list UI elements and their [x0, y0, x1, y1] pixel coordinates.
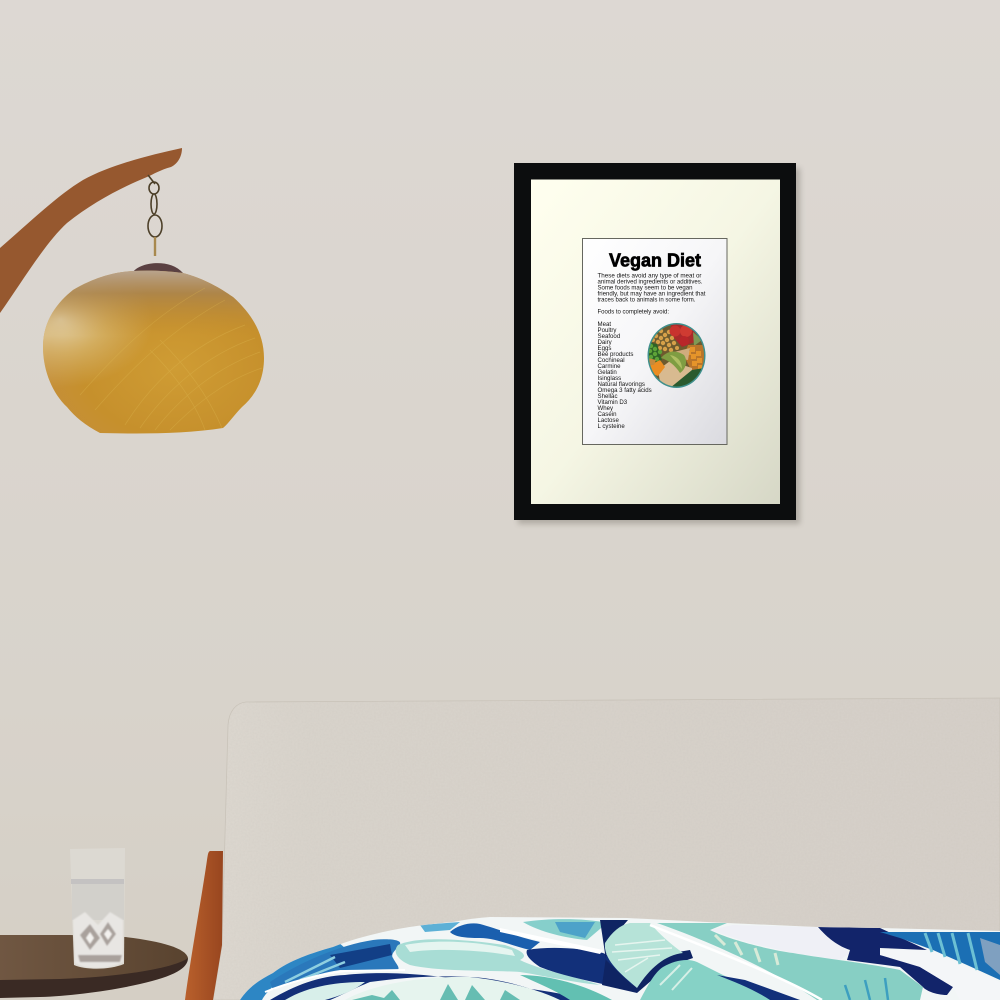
white area [710, 925, 850, 960]
white frond panel with teal fronds [345, 977, 560, 1000]
lamp cap [133, 263, 183, 273]
cream mat board [531, 180, 780, 504]
intro paragraph: These diets avoid any type of meat or [598, 272, 702, 280]
sofa [213, 698, 1000, 1000]
left rim blue stripes [238, 942, 345, 1000]
top teal leaf [523, 919, 607, 940]
navy wedge [600, 920, 693, 993]
foods to avoid list: L cysteine [598, 423, 625, 430]
lamp globe shade [43, 271, 264, 433]
avocado [661, 352, 686, 373]
foods to avoid list: Poultry [598, 327, 617, 334]
water glass [70, 848, 125, 969]
quinoa [658, 362, 692, 386]
intro paragraph: friendly, but may have an ingredient that [598, 290, 706, 298]
foods to avoid list: Dairy [598, 339, 613, 346]
frame shadow [518, 168, 800, 524]
tomatoes [670, 324, 696, 347]
foods to avoid list: Isinglass [598, 375, 621, 382]
white gap right [880, 955, 953, 987]
white stem line [265, 970, 405, 992]
pale leaf lower left [285, 982, 365, 1000]
navy diagonal band [526, 948, 633, 985]
foods to avoid list: Omega 3 fatty acids [598, 387, 652, 394]
foods to avoid list: Eggs [598, 345, 611, 352]
lamp [0, 148, 264, 433]
lower teal leaf [640, 960, 800, 1000]
lamp chain [148, 175, 162, 256]
foods to avoid list: Lactose [598, 417, 619, 424]
navy central stem [270, 973, 590, 1000]
intro paragraph: animal derived ingredients or additives. [598, 278, 703, 286]
foods to avoid list: Carmine [598, 363, 621, 370]
foods to avoid list [598, 321, 652, 430]
roasted squash [686, 345, 704, 370]
greens [672, 368, 702, 386]
foods to avoid list: Whey [598, 405, 614, 412]
poster sheet [582, 238, 727, 444]
foods to avoid list: Casein [598, 411, 616, 418]
sofa back cushion [213, 698, 1000, 1000]
intro paragraph [598, 272, 706, 304]
left blue leaf [270, 939, 400, 990]
foods to avoid list: Vitamin D3 [598, 399, 628, 406]
right blue striped leaf [880, 932, 1000, 980]
foods to avoid list: Shellac [598, 393, 618, 400]
orange sweet potato [650, 360, 665, 376]
intro paragraph: Some foods may seem to be vegan [598, 284, 693, 292]
peas [649, 343, 662, 362]
foods to avoid list: Meat [598, 321, 611, 328]
lamp wooden arm [0, 148, 182, 313]
side table [0, 935, 188, 998]
foods to avoid list: Cochineal [598, 357, 625, 364]
pale veined leaf [605, 923, 683, 988]
navy right leaf [818, 927, 953, 995]
black frame [514, 163, 796, 520]
chair wooden arm [185, 851, 223, 1000]
big teal leaf [657, 923, 923, 1000]
foods to avoid list: Natural flavorings [598, 381, 645, 388]
poster title: Vegan Diet [609, 250, 701, 270]
foods to avoid heading: Foods to completely avoid: [598, 308, 669, 316]
top blue leaf [420, 922, 460, 932]
pale teal central leaf [396, 939, 600, 985]
foods to avoid list: Bee products [598, 351, 633, 358]
chickpeas [651, 329, 679, 352]
foods to avoid list: Seafood [598, 333, 620, 340]
table edge [0, 958, 188, 998]
foods to avoid list: Gelatin [598, 369, 617, 376]
table top [0, 935, 188, 980]
tropical leaf pillow [238, 917, 1000, 1000]
intro paragraph: traces back to animals in some form. [598, 296, 696, 304]
icon: vegan food bowl [648, 323, 706, 388]
white stripe [650, 925, 822, 1000]
framed poster [514, 163, 800, 524]
